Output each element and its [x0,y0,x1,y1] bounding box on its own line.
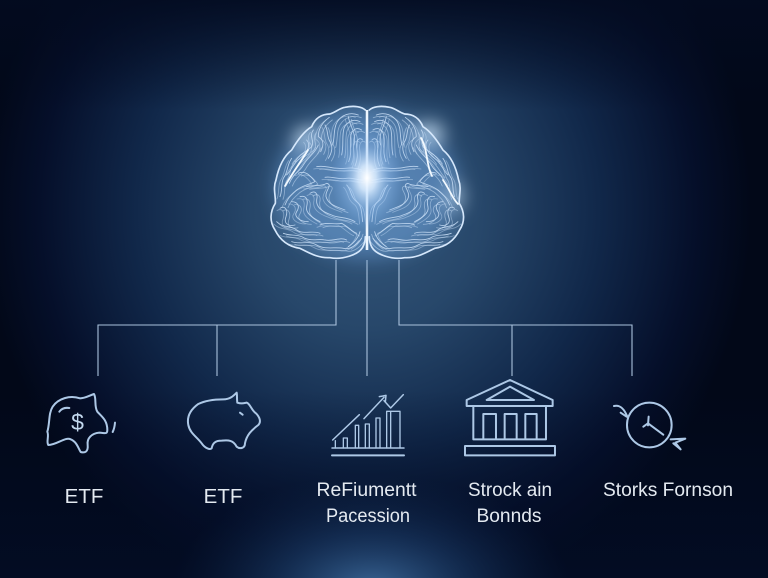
icon: dollar sign: $ [71,409,84,435]
central fissure [331,110,403,250]
left hemisphere [271,106,366,258]
label: ETF: ETF [204,485,242,508]
icon: piggy bank with dollar [47,394,115,452]
icon: bank building [465,380,555,455]
label: ETF: ETF [65,485,103,508]
icon: growth chart [332,395,404,455]
connector lines [98,260,632,376]
label: Storks Fornson: Storks Fornson [603,480,733,501]
label: Strock ain Bonnds: Strock ain [468,480,552,501]
icon: clock with arrow [614,403,685,449]
label: Strock ain Bonnds: Bonnds [476,506,542,527]
right hemisphere [369,106,464,258]
icon: piggy bank [188,393,260,449]
brain illustration [271,106,464,259]
label: ReFiumentt Pacession: Pacession [326,506,410,527]
brain outer glow [275,111,462,259]
label: ReFiumentt Pacession: ReFiumentt [316,480,417,501]
bright highlights [285,138,458,204]
